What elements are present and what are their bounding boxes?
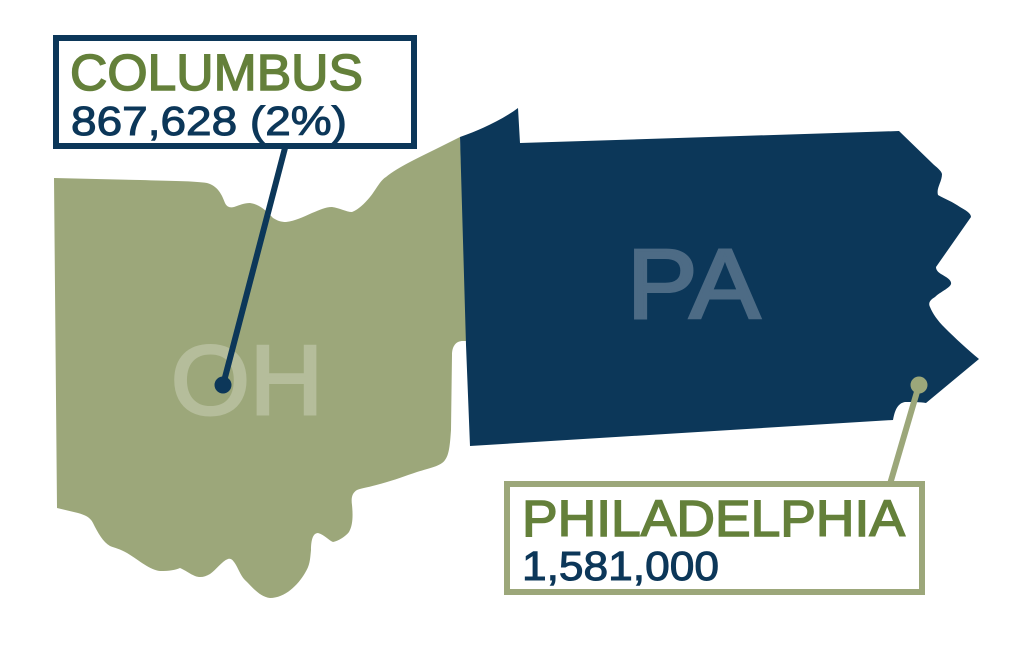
callout: Columbus [56,38,414,146]
map: Ohio [54,137,468,598]
leader line: Columbus [214,148,285,394]
callout: Philadelphia [507,484,922,592]
map: Pennsylvania [460,108,979,446]
callout value: Philadelphia: 1,581,000 [522,543,719,589]
callout title: Columbus: COLUMBUS [70,44,363,101]
callout title: Philadelphia: PHILADELPHIA [522,490,905,547]
leader line: Philadelphia [890,376,928,484]
label: PA: PA [627,229,761,339]
label: OH: OH [171,325,323,435]
callout value: Columbus: 867,628 (2%) [71,98,347,144]
